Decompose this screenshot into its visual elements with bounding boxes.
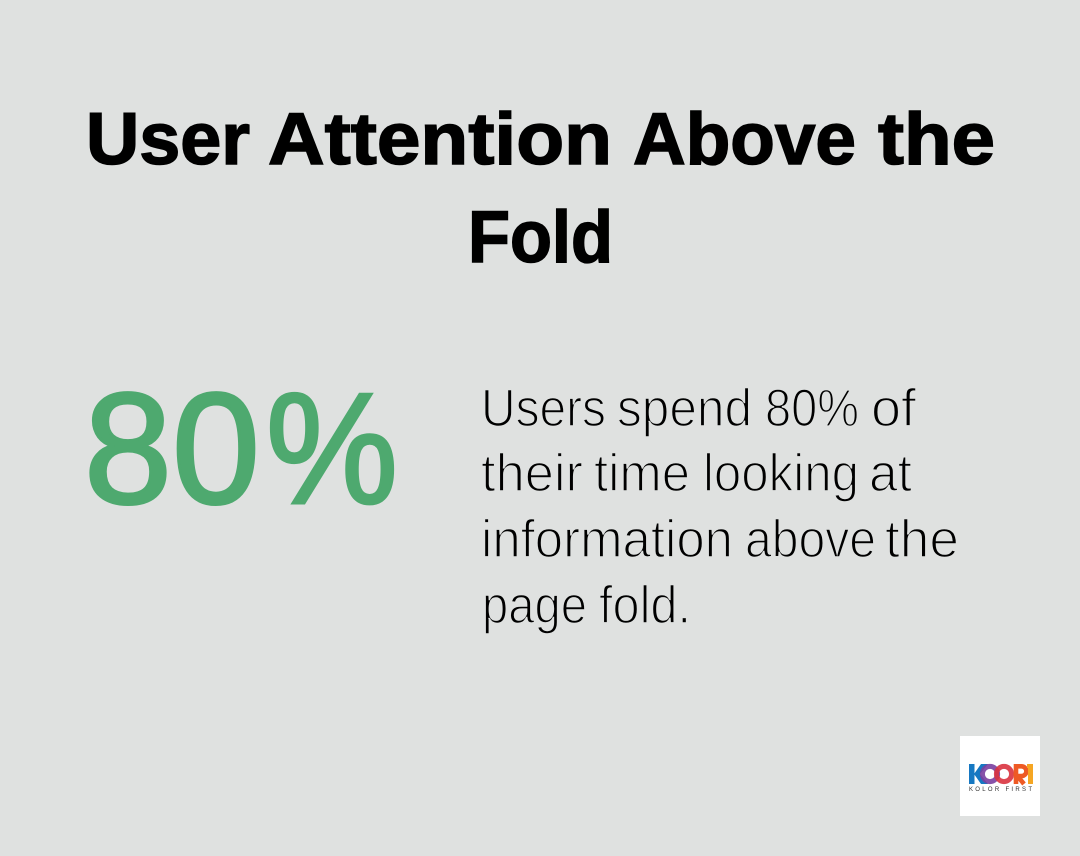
description text: the <box>885 510 959 569</box>
logo tagline: KOLOR FIRST <box>969 787 1032 793</box>
description text: above <box>745 510 876 569</box>
description text: at <box>869 444 912 503</box>
title: Attention <box>268 99 612 180</box>
description text: Users <box>481 379 606 438</box>
title: Fold <box>468 197 613 278</box>
logo: KOOR1 Kolor First <box>960 736 1040 816</box>
big statistic: 80%: % <box>266 361 398 537</box>
description text: of <box>871 379 916 438</box>
description text: their <box>481 444 583 503</box>
description text: fold. <box>599 576 691 635</box>
logo digit 1 <box>1027 764 1033 784</box>
description text <box>481 379 959 635</box>
title <box>86 99 995 278</box>
title: User <box>86 99 250 180</box>
description text: page <box>482 576 587 635</box>
logo letter K <box>969 764 988 784</box>
description text: spend <box>617 379 752 438</box>
big statistic: 80%: 80 <box>84 361 260 537</box>
logo letter R <box>1016 766 1026 784</box>
description text: 80% <box>765 379 859 438</box>
description text: information <box>481 510 733 569</box>
big statistic: 80% <box>84 361 398 537</box>
logo letters O O <box>982 766 1012 782</box>
title: Above <box>633 99 856 180</box>
description text: looking <box>703 444 859 503</box>
description text: time <box>594 444 690 503</box>
title: the <box>878 99 995 180</box>
